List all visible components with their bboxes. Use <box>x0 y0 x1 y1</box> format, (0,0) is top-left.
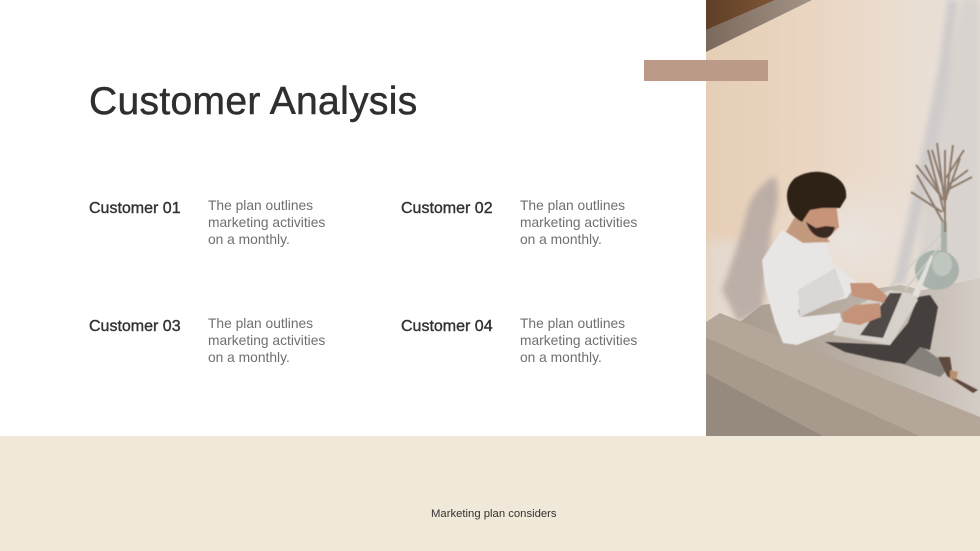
neck and face <box>786 210 830 243</box>
footer band <box>0 436 980 551</box>
accent bar <box>644 60 768 81</box>
customer 02 label: Customer 02 <box>401 200 493 217</box>
wall shadow on right <box>915 0 980 285</box>
customer 01 description: on a monthly. <box>208 232 290 247</box>
shin <box>900 343 950 377</box>
ceiling beam <box>706 0 812 52</box>
hands <box>850 283 887 303</box>
legs <box>825 295 938 364</box>
customer 03 description: marketing activities <box>208 333 325 348</box>
customer 02 description: The plan outlines <box>520 198 625 212</box>
customer 03 label: Customer 03 <box>89 318 181 335</box>
customer 04 description <box>520 316 637 365</box>
laptop screen <box>912 255 933 298</box>
customer 01 description <box>208 198 325 247</box>
customer 01 description: marketing activities <box>208 215 325 230</box>
customer 02 description <box>520 198 637 247</box>
customer 04 description: The plan outlines <box>520 316 625 330</box>
man <box>762 172 978 393</box>
sweater <box>762 230 857 345</box>
customer 01 description: The plan outlines <box>208 198 313 212</box>
customer 03 description: The plan outlines <box>208 316 313 330</box>
feet <box>938 357 978 393</box>
keyboard <box>860 293 902 338</box>
laptop base <box>833 290 918 345</box>
customer 04 description: on a monthly. <box>520 350 602 365</box>
customer 01 label: Customer 01 <box>89 200 181 217</box>
customer 02 description: on a monthly. <box>520 232 602 247</box>
man's shadow on wall <box>722 176 778 322</box>
customer 02 description: marketing activities <box>520 215 637 230</box>
customer 04 label: Customer 04 <box>401 318 493 335</box>
customer 03 description <box>208 316 325 365</box>
footer text: Marketing plan considers <box>431 508 557 520</box>
customer 04 description: marketing activities <box>520 333 637 348</box>
title: Customer Analysis <box>89 80 418 123</box>
customer 03 description: on a monthly. <box>208 350 290 365</box>
vase and branches <box>890 143 972 290</box>
hair <box>787 172 846 222</box>
floor <box>740 278 980 440</box>
photo: man working on a laptop on steps <box>706 0 980 436</box>
